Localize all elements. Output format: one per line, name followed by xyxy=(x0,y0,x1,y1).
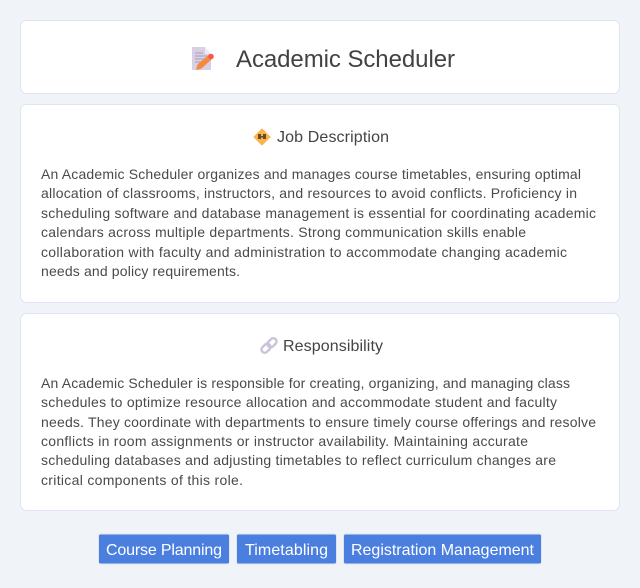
text block: responsibility: schedules to optimize resource allocation and accommodate student and faculty xyxy=(41,394,557,410)
tag: timetabling: Timetabling xyxy=(245,542,328,559)
heading: responsibility: Responsibility xyxy=(283,338,383,355)
icon: document with pencil xyxy=(192,47,214,70)
panel: title card xyxy=(20,20,620,94)
tag: registration management xyxy=(344,534,542,564)
panel: responsibility xyxy=(20,314,620,510)
text block: job description xyxy=(41,166,596,279)
text block: job description: needs and policy requirements. xyxy=(41,263,240,279)
text block: job description: An Academic Scheduler organizes and manages course timetables, ensuring optimal xyxy=(41,166,581,182)
tag: course planning xyxy=(98,534,230,564)
icon: diamond sign xyxy=(254,129,270,145)
panel: job description xyxy=(20,104,620,302)
icon: chain link xyxy=(260,337,278,354)
text block: job description: allocation of classrooms, instructors, and resources to avoid conflicts. Proficiency in xyxy=(41,185,577,201)
heading: job description: Job Description xyxy=(277,129,389,146)
text block: responsibility: critical components of this role. xyxy=(41,472,243,488)
text block: job description: calendars across multiple departments. Strong communication skills enable xyxy=(41,224,526,240)
text block: responsibility: conflicts in room assignments or instructor availability. Maintaining accurate xyxy=(41,433,528,449)
title: Academic Scheduler xyxy=(236,46,455,73)
text block: responsibility: needs. They coordinate with departments to ensure timely course offerings and resolve xyxy=(41,414,596,430)
text block: responsibility: An Academic Scheduler is responsible for creating, organizing, and managing class xyxy=(41,375,570,391)
text block: job description: collaboration with faculty and administration to accommodate changing academic xyxy=(41,244,567,260)
tag: registration management: Registration Management xyxy=(351,542,535,559)
text block: responsibility: scheduling databases and adjusting timetables to reflect curriculum changes are xyxy=(41,452,556,468)
tag: course planning: Course Planning xyxy=(106,542,222,559)
text block: responsibility xyxy=(41,375,596,488)
tag: timetabling xyxy=(236,534,336,564)
text block: job description: scheduling software and database management is essential for coordinating academic xyxy=(41,205,596,221)
